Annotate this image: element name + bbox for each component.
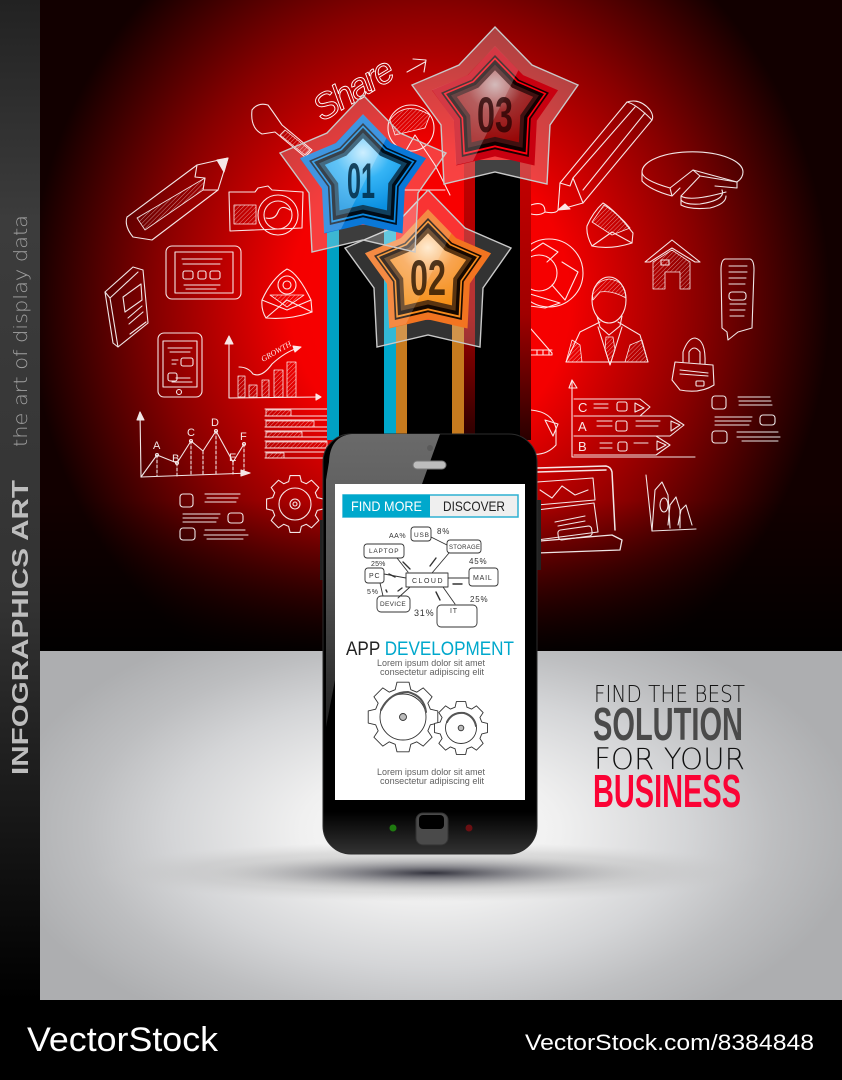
home button (416, 813, 448, 845)
led: green (390, 824, 396, 832)
icon: camera (229, 186, 303, 235)
cloud diagram: IT (450, 608, 458, 615)
icon: wrench (252, 104, 312, 157)
body text 1: Lorem ipsum dolor sit amet (377, 658, 485, 668)
star 03 (412, 27, 578, 184)
number 02: 02 (410, 250, 446, 306)
cloud diagram: MAIL (473, 575, 493, 582)
body text 2: consectetur adipiscing elit (380, 776, 484, 786)
icon: padlock (672, 338, 714, 391)
icon: text list right (712, 396, 780, 443)
icon: gear left (267, 476, 323, 532)
cloud diagram: USB (414, 532, 430, 539)
icon: open envelope (587, 203, 633, 247)
heading: app development: APP DEVELOPMENT (346, 638, 514, 660)
cloud diagram (364, 527, 498, 627)
icon: curved arrow (531, 410, 558, 454)
footer logo: VectorStock (27, 1021, 219, 1059)
smartphone (320, 434, 541, 854)
icon: businessman (566, 277, 648, 365)
icon: person behind star (388, 105, 450, 195)
stripes from stars to phone (327, 160, 531, 440)
chart: arrow bars: B (578, 439, 587, 454)
sidebar tagline: the art of display data (10, 215, 32, 447)
cloud diagram: 5% (367, 589, 379, 596)
panel: red backdrop (40, 0, 842, 651)
icon: tablet (166, 246, 241, 299)
chart: ring diagram (515, 239, 583, 308)
chart: line chart A-F: E (229, 452, 236, 464)
cloud diagram: 45% (469, 557, 487, 566)
share label: Share (305, 48, 402, 129)
icon: right pencil (531, 101, 653, 215)
tab: find more: FIND MORE (351, 498, 422, 514)
phone body (323, 434, 537, 854)
headline: find the best solution (593, 680, 745, 817)
footer url: VectorStock.com/8384848 (525, 1030, 814, 1055)
cloud diagram: STORAGE (449, 545, 480, 551)
chart: pie sketch (642, 152, 743, 209)
chart: line chart A-F: B (172, 453, 179, 465)
phone camera (427, 445, 433, 451)
gears sketch (368, 682, 487, 754)
chart: line chart A-F: C (187, 427, 195, 439)
cloud diagram: CLOUD (412, 578, 444, 585)
star 02 (345, 190, 511, 347)
icon: speech bubble (721, 259, 754, 340)
body text 2: Lorem ipsum dolor sit amet (377, 767, 485, 777)
phone screen (335, 484, 525, 800)
icon: book (105, 267, 148, 347)
body text 2 (377, 767, 485, 786)
number 01: 01 (347, 153, 375, 209)
stripe: 01 blue (327, 225, 396, 440)
stripe: 03 red (464, 160, 531, 440)
chart: line chart A-F: D (211, 417, 219, 429)
led: red (466, 824, 472, 832)
chart: line chart A-F: A (153, 440, 161, 452)
chart: line chart A-F (137, 412, 250, 477)
chart: arrow bars (569, 380, 695, 457)
number 03: 03 (477, 87, 513, 143)
star 01 (280, 95, 446, 252)
cloud diagram: LAPTOP (369, 548, 399, 555)
doodle icons (105, 48, 780, 553)
line: solution: SOLUTION (593, 698, 743, 750)
sidebar (0, 0, 40, 1000)
panel: gray floor (40, 651, 842, 1000)
line: for your: FOR YOUR (594, 742, 745, 776)
icon: house (645, 240, 700, 289)
phone speaker (413, 461, 446, 469)
phone side buttons (320, 500, 541, 580)
icon: laptop (537, 466, 622, 553)
cloud diagram: DEVICE (380, 601, 406, 608)
phone glass highlight (326, 434, 440, 727)
body text 1 (377, 658, 485, 677)
cloud diagram: 31% (414, 608, 434, 618)
chart: growth bars: GROWTH (260, 339, 294, 364)
icon: ruler (531, 329, 552, 355)
chart: arrow bars: A (578, 419, 587, 434)
chart: arrow bars: C (578, 400, 587, 415)
cloud diagram: 8% (437, 527, 450, 536)
line: business: BUSINESS (593, 765, 741, 817)
chart: growth bars (225, 336, 321, 400)
body text 1: consectetur adipiscing elit (380, 667, 484, 677)
footer bar (0, 1000, 842, 1080)
icon: small phone (158, 333, 202, 397)
chart: horizontal bars (265, 409, 327, 458)
sidebar title: INFOGRAPHICS ART (7, 480, 33, 775)
stripe: 02 orange (396, 320, 464, 440)
cloud diagram: AA% (389, 533, 406, 540)
icon: mail envelope (262, 269, 312, 318)
cloud diagram: 25% (470, 595, 488, 604)
line: find the best: FIND THE BEST (594, 680, 745, 708)
icon: text list left (180, 494, 248, 540)
floor shadow (90, 842, 770, 902)
cloud diagram: 25% (371, 561, 386, 568)
cloud diagram: PC (369, 573, 380, 580)
chart: line chart A-F: F (240, 431, 247, 443)
icon: left pencil (126, 158, 228, 240)
tab bar (343, 494, 518, 517)
tab: discover: DISCOVER (443, 498, 505, 514)
chart: mini arrow chart (646, 475, 696, 531)
